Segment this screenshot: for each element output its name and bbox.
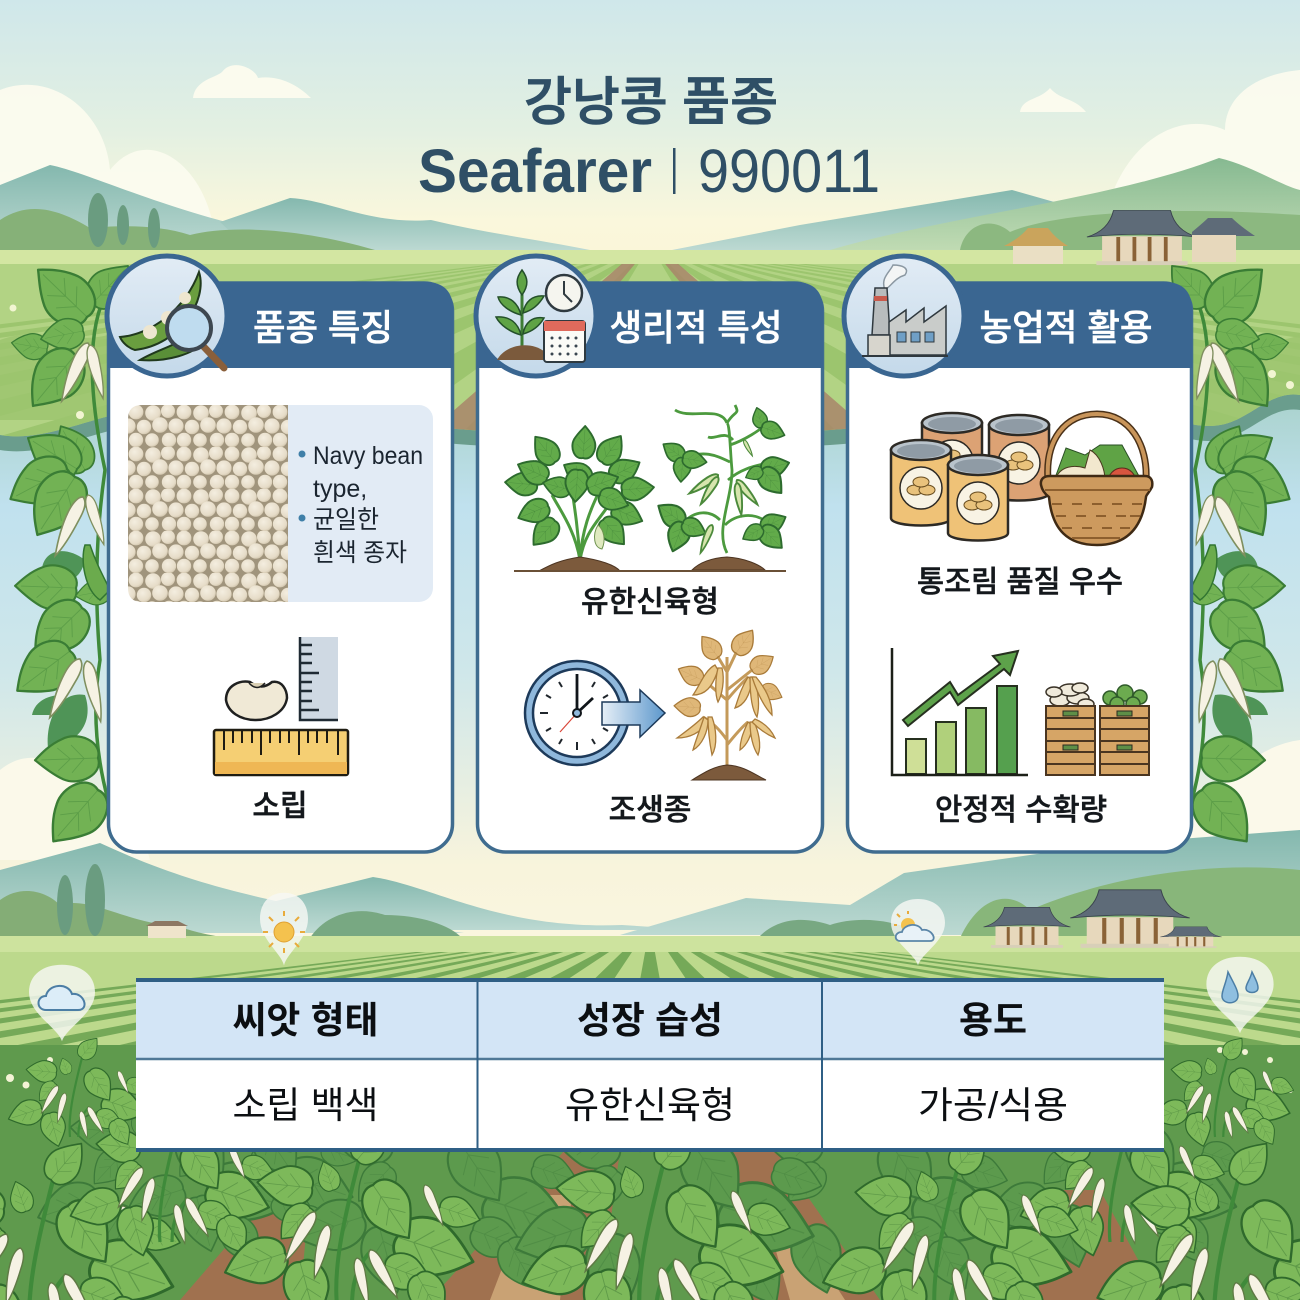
title: 강낭콩 품종	[524, 74, 778, 132]
icon: sprout, clock, calendar	[476, 256, 596, 376]
summary table	[136, 980, 1164, 1150]
illustration: climbing plant	[652, 405, 792, 570]
column 1	[232, 1000, 378, 1126]
ground line	[514, 570, 786, 572]
weather pin: water drops	[1206, 957, 1274, 1033]
column 3: 용도	[959, 1000, 1027, 1041]
seed sample card	[128, 405, 433, 602]
panel: 농업적 활용	[844, 256, 1192, 852]
background: upper crop field	[0, 250, 1300, 452]
column 3	[918, 1000, 1068, 1126]
icon: clock	[525, 661, 629, 765]
illustration: harvest crates	[1046, 683, 1149, 775]
panel: 생리적 특성	[476, 256, 823, 852]
background: upper mountains	[0, 158, 1300, 255]
illustration: mature dry plant	[673, 624, 785, 780]
background: brown soil furrows	[180, 1150, 1160, 1300]
right bean vine	[1159, 252, 1300, 857]
label: 소립: 소립	[252, 790, 308, 823]
header band	[108, 282, 453, 368]
weather pin: cloud	[29, 965, 95, 1041]
label: 안정적 수확량: 안정적 수확량	[935, 794, 1107, 827]
heading: 농업적 활용	[980, 307, 1152, 348]
column 1: 소립 백색	[232, 1085, 378, 1126]
label: 통조림 품질 우수: 통조림 품질 우수	[917, 566, 1123, 599]
background: upper sky	[0, 0, 1300, 260]
background: upper-right village houses	[1004, 210, 1255, 265]
background: darker bean foliage	[31, 1060, 1248, 1300]
column 2: 유한신육형	[565, 1085, 735, 1126]
icon: factory	[844, 256, 964, 376]
arrow	[602, 690, 665, 737]
card bullets: Navy bean	[313, 442, 423, 470]
header band	[847, 282, 1192, 368]
title: 990011	[698, 137, 880, 205]
weather pin: sun and cloud	[891, 899, 945, 965]
column 1: 씨앗 형태	[232, 1000, 378, 1041]
illustration: cans and basket	[891, 413, 1152, 545]
column 3: 가공/식용	[918, 1085, 1068, 1126]
illustration: determinate bush	[504, 425, 655, 571]
label: 조생종: 조생종	[609, 794, 691, 827]
header band	[477, 282, 823, 368]
background: lower crop field	[0, 925, 1300, 1300]
icon: pods and magnifier	[107, 256, 227, 376]
heading: 품종 특징	[253, 307, 393, 348]
card bullets: 균일한	[313, 506, 379, 534]
weather pin: sun	[260, 893, 308, 965]
column 2	[565, 1000, 735, 1126]
title: Seafarer	[418, 137, 652, 205]
column 2: 성장 습성	[577, 1000, 723, 1041]
background: lower mountains	[0, 830, 1300, 938]
icon: bean with rulers	[214, 637, 348, 775]
background: bean plants foreground	[0, 1033, 1300, 1300]
header row	[136, 980, 1164, 1059]
heading: 생리적 특성	[610, 307, 782, 348]
bar chart: rising yield	[892, 648, 1028, 775]
panel: 품종 특징	[107, 256, 453, 852]
title	[418, 74, 880, 205]
bean photo	[128, 405, 288, 602]
value row	[136, 1059, 1164, 1150]
card bullets	[298, 442, 423, 567]
card bullets: type,	[313, 475, 367, 503]
background: lower clouds	[0, 740, 1300, 860]
label: 유한신육형: 유한신육형	[581, 586, 719, 619]
background: lower village houses	[146, 890, 1222, 948]
card bullets: 흰색 종자	[313, 539, 407, 567]
left bean vine	[0, 252, 141, 857]
background: lower sky band	[0, 395, 1300, 950]
background: clouds upper	[0, 65, 1300, 240]
